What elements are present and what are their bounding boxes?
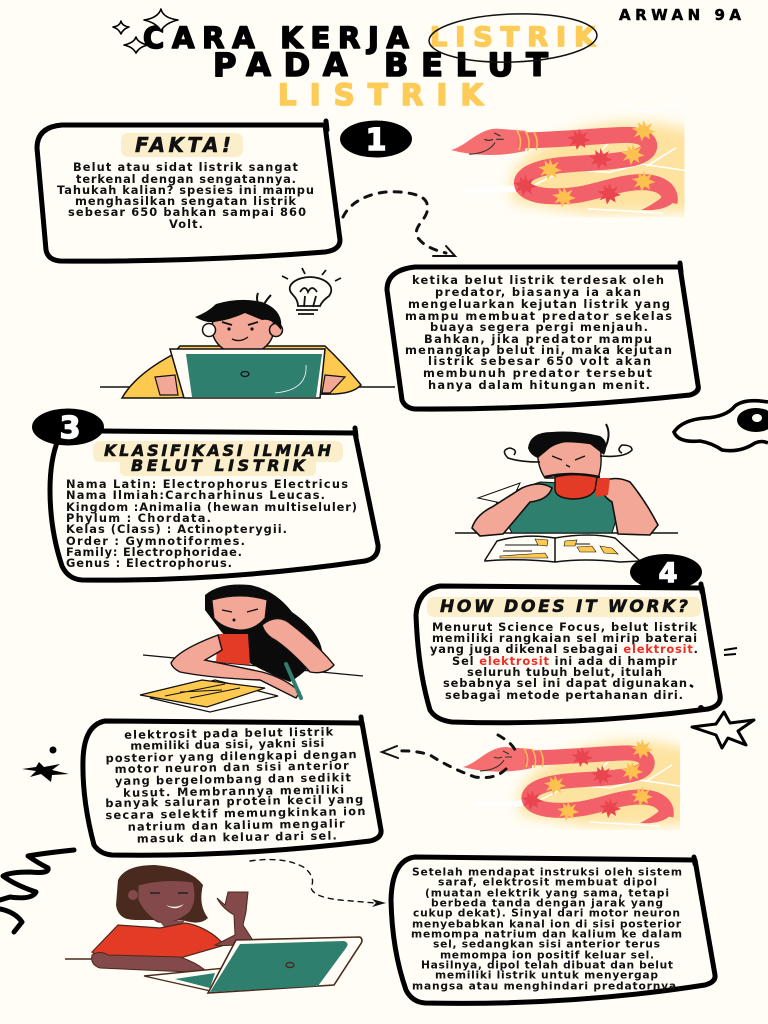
eel illustration top	[451, 102, 695, 213]
text: how does it work: Menurut Science Focus, belut listrik	[432, 620, 697, 634]
text: how does it work: seluruh tubuh belut, itulah	[467, 665, 662, 679]
decoration: egg doodle	[674, 401, 768, 451]
text: predator: ketika belut listrik terdesak oleh	[412, 273, 664, 287]
heading: klasifikasi: KLASIFIKASI ILMIAH	[104, 441, 332, 460]
title	[143, 21, 596, 112]
title oval scribble	[428, 11, 598, 65]
text: fakta: Volt.	[169, 217, 203, 231]
title: PADA BELUT	[213, 46, 548, 84]
icon: open book	[485, 535, 640, 562]
text: final explanation	[411, 866, 682, 992]
icon: sparkles	[113, 9, 178, 53]
text: how does it work: memiliki rangkaian sel mirip baterai	[432, 631, 697, 645]
text: klasifikasi: Nama Ilmiah:Carcharhinus Leucas.	[66, 488, 325, 502]
text: how does it work: sebabnya sel ini dapat digunakan	[443, 676, 687, 690]
text: fakta: Belut atau sidat listrik sangat	[73, 160, 299, 174]
illustration: girl thinking	[140, 584, 363, 712]
text: predator: mampu membuat predator sekelas	[405, 309, 672, 323]
panel: elektrosit	[83, 717, 381, 855]
text: final explanation: Setelah mendapat instruksi oleh sistem	[412, 866, 682, 878]
badge 3: 3	[60, 411, 80, 446]
icon: star left	[22, 762, 69, 782]
badge 4: 4	[659, 558, 677, 589]
text: klasifikasi: Kingdom :Animalia (hewan multiseluler)	[66, 500, 357, 514]
arrow: elektrosit to final panel	[250, 860, 386, 907]
text: fakta: menghasilkan sengatan listrik	[75, 194, 296, 208]
text: elektrosit: banyak saluran protein kecil yang	[105, 792, 363, 810]
text: predator: listrik sebesar 650 volt akan	[428, 354, 651, 368]
decoration: marks	[50, 648, 737, 752]
text: klasifikasi	[66, 477, 357, 570]
text: final explanation: memompa natrium dan kalium ke dalam	[411, 928, 682, 940]
text: elektrosit: motor neuron dan sisi anterior	[115, 758, 349, 776]
icon: yellow papers	[140, 680, 278, 712]
text: final explanation: berbeda tanda dengan jarak yang	[431, 896, 663, 910]
text: fakta	[57, 160, 314, 231]
text: how does it work	[430, 620, 698, 702]
panel: predator	[387, 263, 698, 409]
badge 4	[630, 554, 702, 590]
author label: ARWAN 9A	[619, 6, 741, 24]
badge 1: 1	[366, 123, 386, 158]
badge 3	[32, 408, 104, 446]
arrow: eel to elektrosit panel	[382, 735, 515, 778]
text: how does it work: sebagai metode pertahanan diri.	[445, 688, 683, 702]
heading: klasifikasi: BELUT LISTRIK	[131, 456, 307, 475]
arrow: fakta to predator	[343, 192, 455, 256]
text: elektrosit	[104, 724, 366, 846]
illustration: man drinking with book	[455, 424, 678, 562]
text: final explanation: (muatan elektrik yang sama, tetapi	[425, 886, 669, 900]
heading: klasifikasi	[93, 441, 343, 476]
title: LISTRIK	[430, 22, 596, 53]
text: elektrosit: kusut. Membrannya memiliki	[123, 782, 344, 800]
text: predator: hanya dalam hitungan menit.	[428, 378, 650, 392]
heading: how does it work: HOW DOES IT WORK?	[440, 597, 688, 617]
text: final explanation: memompa ion positif keluar sel.	[440, 948, 654, 962]
icon: light bulb	[282, 268, 341, 314]
text: fakta: Tahukah kalian? spesies ini mampu	[57, 183, 314, 197]
text: predator: menangkap belut ini, maka kejutan	[405, 343, 672, 357]
text: fakta: sebesar 650 bahkan sampai 860	[68, 205, 306, 219]
text: elektrosit: natrium dan kalium mengalir	[128, 816, 345, 834]
text: how does it work: yang juga dikenal sebagai elektrosit.	[430, 642, 698, 656]
text: predator: buaya segera pergi menjauh.	[430, 320, 648, 334]
text: klasifikasi: Phylum : Chordata.	[66, 511, 211, 525]
text: predator: Bahkan, jika predator mampu	[424, 332, 652, 346]
text: elektrosit: masuk dan keluar dari sel.	[137, 828, 337, 846]
text: elektrosit: elektrosit pada belut listrik	[124, 725, 334, 742]
text: klasifikasi: Order : Gymnotiformes.	[66, 534, 245, 548]
panel: how does it work	[416, 584, 720, 723]
text: final explanation: memiliki listrik untuk menyergap	[435, 968, 658, 982]
icon: star right	[692, 712, 754, 748]
panel: fakta	[37, 121, 340, 261]
title: LISTRIK	[278, 78, 485, 112]
text: predator: predator, biasanya ia akan	[435, 285, 641, 299]
text: final explanation: Hasilnya, dipol telah dibuat dan belut	[421, 958, 673, 972]
decoration: squiggle	[0, 850, 74, 932]
text: predator: membunuh predator tersebut	[423, 366, 653, 380]
text: elektrosit: posterior yang dilengkapi dengan	[105, 747, 357, 765]
panel: klasifikasi	[32, 408, 378, 580]
title: CARA KERJA	[143, 21, 410, 55]
badge 1	[340, 120, 412, 158]
text: final explanation: mangsa atau menghindari predatornya.	[412, 980, 681, 992]
text: klasifikasi: Nama Latin: Electrophorus Electricus	[66, 477, 348, 491]
text: elektrosit: memiliki dua sisi, yakni sisi	[130, 736, 324, 753]
text: final explanation: sel, sedangkan sisi anterior terus	[433, 938, 660, 950]
text: predator	[405, 273, 672, 392]
heading: fakta: FAKTA!	[135, 133, 231, 157]
illustration: girl with laptop	[65, 865, 362, 993]
text: final explanation: menyebabkan kanal ion di sisi posterior	[412, 918, 682, 930]
panel: final explanation	[391, 857, 715, 1003]
text: how does it work: Sel elektrosit ini ada di hampir	[452, 654, 677, 668]
text: fakta: terkenal dengan sengatannya.	[76, 172, 296, 186]
text: predator: mengeluarkan kejutan listrik yang	[408, 297, 670, 311]
text: klasifikasi: Genus : Electrophorus.	[66, 556, 232, 570]
text: klasifikasi: Kelas (Class) : Actinopterygii.	[66, 522, 287, 536]
text: klasifikasi: Family: Electrophoridae.	[66, 545, 242, 559]
text: elektrosit: secara selektif memungkinkan ion	[105, 804, 366, 822]
text: final explanation: saraf, elektrosit membuat dipol	[438, 876, 657, 888]
illustration: boy with laptop and light bulb	[100, 268, 395, 398]
eel illustration bottom	[463, 722, 690, 826]
text: elektrosit: yang bergelombang dan sedikit	[115, 770, 352, 788]
text: final explanation: cukup dekat). Sinyal dari motor neuron	[413, 906, 680, 920]
